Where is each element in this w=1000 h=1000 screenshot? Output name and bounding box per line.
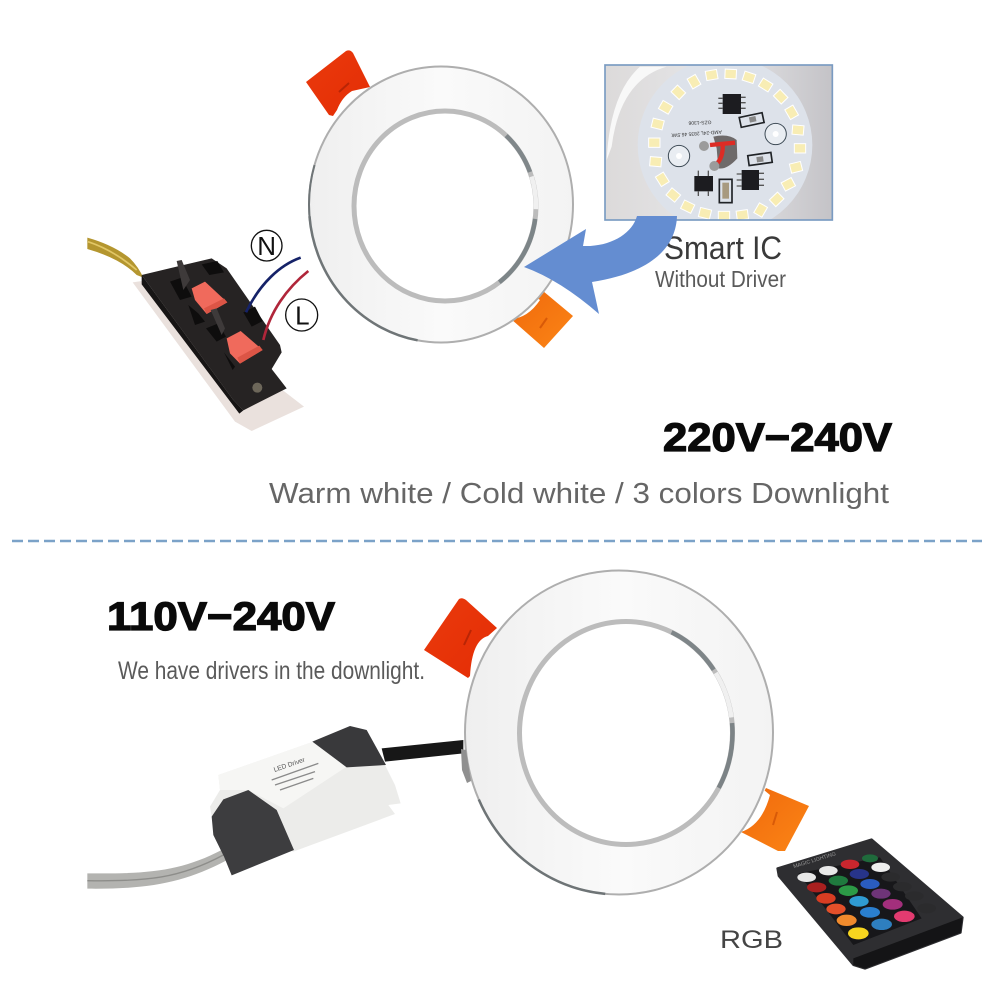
dark end cap near cable xyxy=(212,790,294,875)
mounting holes xyxy=(668,123,786,167)
icon: bottom red spring clip xyxy=(424,598,497,678)
icon: top downlight with clips xyxy=(306,50,573,348)
connector cavities xyxy=(170,261,263,370)
remote brand label: MAGIC LIGHTING xyxy=(793,851,837,870)
bracket: driver connection tab xyxy=(461,749,471,783)
panel: smart IC circuit board photo xyxy=(605,58,832,232)
text: drivers note: We have drivers in the downlight. xyxy=(118,657,425,685)
paper backing xyxy=(133,281,304,431)
screw xyxy=(252,383,262,393)
neutral wire xyxy=(246,258,301,312)
icon: top orange spring clip xyxy=(511,291,573,348)
panel: smart IC circuit board photo: AMD-24L 2835 46.5Wt xyxy=(671,128,722,138)
arrow: blue curved arrow from circuit board to downlight xyxy=(524,216,677,314)
gold input wire xyxy=(87,238,143,278)
text: RGB: RGB xyxy=(720,926,783,954)
icon: bottom orange spring clip xyxy=(741,788,809,851)
text: Smart IC: Smart IC xyxy=(664,230,782,266)
ring: bottom downlight trim xyxy=(465,570,773,894)
dark end cap near downlight xyxy=(312,726,386,767)
IC chips xyxy=(694,94,759,191)
icon: RGB remote control xyxy=(777,839,963,969)
icon: bottom downlight with clips xyxy=(424,570,809,894)
heading: 220V-240V: 220V−240V xyxy=(663,416,892,460)
heading: 110V-240V: 110V−240V xyxy=(107,595,335,639)
driver label: LED Driver xyxy=(273,756,307,774)
text: light colour options: Warm white / Cold white / 3 colors Downlight xyxy=(269,478,889,510)
white driver housing xyxy=(210,742,401,852)
small components xyxy=(719,113,772,203)
red push tab 1 xyxy=(192,282,227,314)
board print: GZS-1306 xyxy=(688,119,712,125)
ring: top downlight trim xyxy=(309,66,573,342)
grey input cable xyxy=(87,850,226,889)
icon: terminal block with N and L wires xyxy=(87,230,318,431)
L label: L xyxy=(295,300,310,330)
red push tab 2 xyxy=(227,331,263,364)
text: Without Driver: Without Driver xyxy=(655,266,786,292)
LED chips xyxy=(649,69,806,221)
icon: top red spring clip xyxy=(306,50,370,116)
black connector body xyxy=(142,258,287,410)
red wire and solder xyxy=(713,136,737,169)
remote buttons xyxy=(797,854,936,939)
live wire xyxy=(263,271,308,340)
black output cable xyxy=(382,740,463,762)
N label: N xyxy=(257,231,276,261)
L label xyxy=(286,299,318,331)
N label xyxy=(251,230,282,261)
icon: LED driver with cables xyxy=(87,726,463,889)
